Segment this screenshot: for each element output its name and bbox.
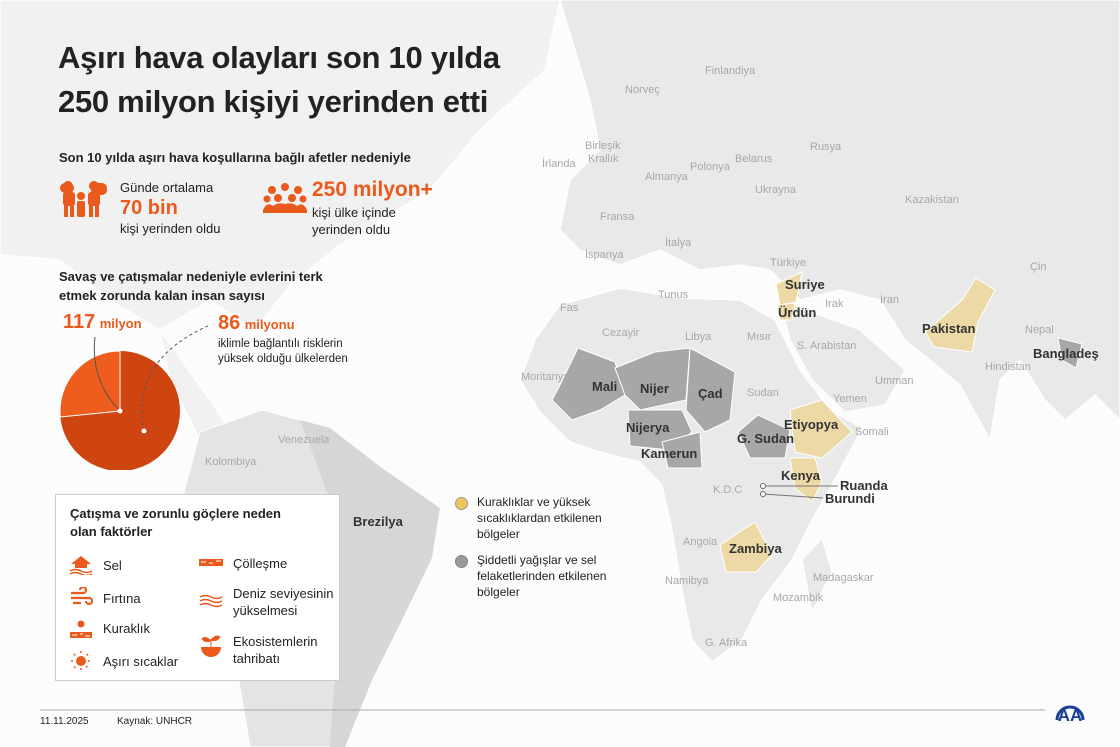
map background: Libya bbox=[685, 331, 712, 343]
map background: Finlandiya bbox=[705, 65, 756, 77]
legend: flood: Şiddetli yağışlar ve sel felaketlerinden etkilenen bölgeler bbox=[477, 553, 606, 599]
stat: 250 milyon+ bbox=[263, 178, 433, 237]
map background: Tunus bbox=[658, 289, 689, 301]
icon: people walking bbox=[60, 181, 107, 217]
map background: Angola bbox=[683, 536, 718, 548]
legend item: aşırı sıcaklar bbox=[71, 651, 178, 670]
map background: Bangladeş bbox=[1033, 346, 1099, 361]
stat: 250 milyon+: kişi ülke içinde bbox=[312, 205, 396, 220]
title: 250 milyon kişiyi yerinden etti bbox=[58, 84, 488, 119]
map background: Krallık bbox=[588, 153, 619, 165]
map background: Brezilya bbox=[353, 514, 404, 529]
map background: Kazakistan bbox=[905, 194, 959, 206]
legend heading bbox=[70, 506, 281, 539]
map background: Ürdün bbox=[778, 305, 816, 320]
map background: Kenya bbox=[781, 468, 821, 483]
map background: Ruanda bbox=[840, 478, 888, 493]
map background: K.D.C bbox=[713, 484, 742, 496]
footer source: Kaynak: UNHCR bbox=[117, 716, 192, 727]
map background: İrlanda bbox=[542, 157, 577, 170]
map background: Burundi bbox=[825, 491, 875, 506]
map background: Hindistan bbox=[985, 361, 1031, 373]
map background: Almanya bbox=[645, 171, 689, 183]
map background: Suriye bbox=[785, 277, 825, 292]
map background: Kolombiya bbox=[205, 456, 257, 468]
legend heading: olan faktörler bbox=[70, 524, 152, 539]
map background: Türkiye bbox=[770, 257, 806, 269]
stat: 117 milyon: 117 milyon bbox=[63, 311, 142, 333]
legend item: deniz seviyesi bbox=[200, 586, 333, 618]
map background: Kamerun bbox=[641, 446, 697, 461]
stat: 250 milyon+: 250 milyon+ bbox=[312, 178, 433, 201]
map background: Mali bbox=[592, 379, 617, 394]
legend item: kuraklık bbox=[70, 620, 150, 638]
map background: Ukrayna bbox=[755, 184, 797, 196]
legend item: ekosistem bbox=[201, 634, 318, 666]
legend item: çölleşme bbox=[199, 556, 287, 571]
stat: 86 milyonu: iklimle bağlantılı risklerin bbox=[218, 338, 343, 350]
map background: Somali bbox=[855, 426, 889, 438]
map background: Fas bbox=[560, 302, 579, 314]
map background: Madagaskar bbox=[813, 572, 874, 584]
map background: Çad bbox=[698, 386, 723, 401]
legend heading: Çatışma ve zorunlu göçlere neden bbox=[70, 506, 281, 521]
stat: 70 bin bbox=[60, 180, 220, 236]
stat: 86 milyonu: yüksek olduğu ülkelerden bbox=[218, 353, 348, 365]
icon: crowd bbox=[263, 183, 307, 213]
map background: Sudan bbox=[747, 387, 779, 399]
subheading: disasters: Son 10 yılda aşırı hava koşullarına bağlı afetler nedeniyle bbox=[59, 150, 411, 165]
legend item: ekosistem: tahribatı bbox=[233, 651, 280, 666]
stat: 250 milyon+: yerinden oldu bbox=[312, 222, 390, 237]
legend item: ekosistem: Ekosistemlerin bbox=[233, 634, 318, 649]
map background: Norveç bbox=[625, 84, 660, 96]
map background: Nijer bbox=[640, 381, 669, 396]
map background: İran bbox=[880, 293, 899, 306]
map background: Zambiya bbox=[729, 541, 783, 556]
map background: Nepal bbox=[1025, 324, 1054, 336]
legend item: aşırı sıcaklar: Aşırı sıcaklar bbox=[103, 654, 178, 669]
legend item: sel: Sel bbox=[103, 558, 122, 573]
map background: Etiyopya bbox=[784, 417, 839, 432]
map background: Irak bbox=[825, 298, 844, 310]
map background: Mozambik bbox=[773, 592, 824, 604]
map background: Umman bbox=[875, 375, 914, 387]
legend: drought: Kuraklıklar ve yüksek sıcaklıklardan etkilenen bölgeler bbox=[477, 495, 602, 541]
south america bbox=[182, 410, 440, 747]
map background: Cezayir bbox=[602, 327, 640, 339]
map background: Polonya bbox=[690, 161, 731, 173]
map background: İtalya bbox=[665, 236, 692, 249]
subheading: conflict: Savaş ve çatışmalar nedeniyle evlerini terk bbox=[59, 269, 323, 284]
map background: Yemen bbox=[833, 393, 867, 405]
map background: Belarus bbox=[735, 153, 773, 165]
map background: Namibya bbox=[665, 575, 709, 587]
map background: G. Sudan bbox=[737, 431, 794, 446]
subheading: conflict bbox=[59, 269, 323, 303]
map background: Mısır bbox=[747, 331, 772, 343]
map legend bbox=[455, 495, 606, 599]
map background: İspanya bbox=[585, 248, 624, 261]
title bbox=[58, 40, 500, 119]
stat: 70 bin: Günde ortalama bbox=[120, 180, 213, 195]
title: Aşırı hava olayları son 10 yılda bbox=[58, 40, 500, 75]
legend item: çölleşme: Çölleşme bbox=[233, 556, 287, 571]
map background: Pakistan bbox=[922, 321, 976, 336]
footer date: 11.11.2025 bbox=[40, 716, 89, 727]
legend item: sel bbox=[70, 556, 122, 575]
legend item: fırtına: Fırtına bbox=[103, 591, 141, 606]
subheading: conflict: etmek zorunda kalan insan sayısı bbox=[59, 288, 265, 303]
map background: Venezuela bbox=[278, 434, 330, 446]
panel: factors legend bbox=[55, 494, 340, 681]
legend item: deniz seviyesi: yükselmesi bbox=[233, 603, 297, 618]
legend item: deniz seviyesi: Deniz seviyesinin bbox=[233, 586, 333, 601]
pie chart bbox=[60, 325, 208, 470]
stat: 70 bin: 70 bin bbox=[120, 197, 178, 219]
map background: S. Arabistan bbox=[797, 340, 856, 352]
map background: G. Afrika bbox=[705, 637, 748, 649]
map background: Çin bbox=[1030, 261, 1047, 273]
stat: 70 bin: kişi yerinden oldu bbox=[120, 221, 220, 236]
map background: Birleşik bbox=[585, 140, 621, 152]
map background: Moritanya bbox=[521, 371, 570, 383]
map background: Fransa bbox=[600, 211, 635, 223]
map background: Nijerya bbox=[626, 420, 670, 435]
stat: 86 milyonu bbox=[218, 312, 348, 365]
legend item: fırtına bbox=[71, 587, 141, 606]
stat: 86 milyonu: 86 milyonu bbox=[218, 312, 295, 334]
legend item: kuraklık: Kuraklık bbox=[103, 621, 150, 636]
map background: Rusya bbox=[810, 141, 842, 153]
